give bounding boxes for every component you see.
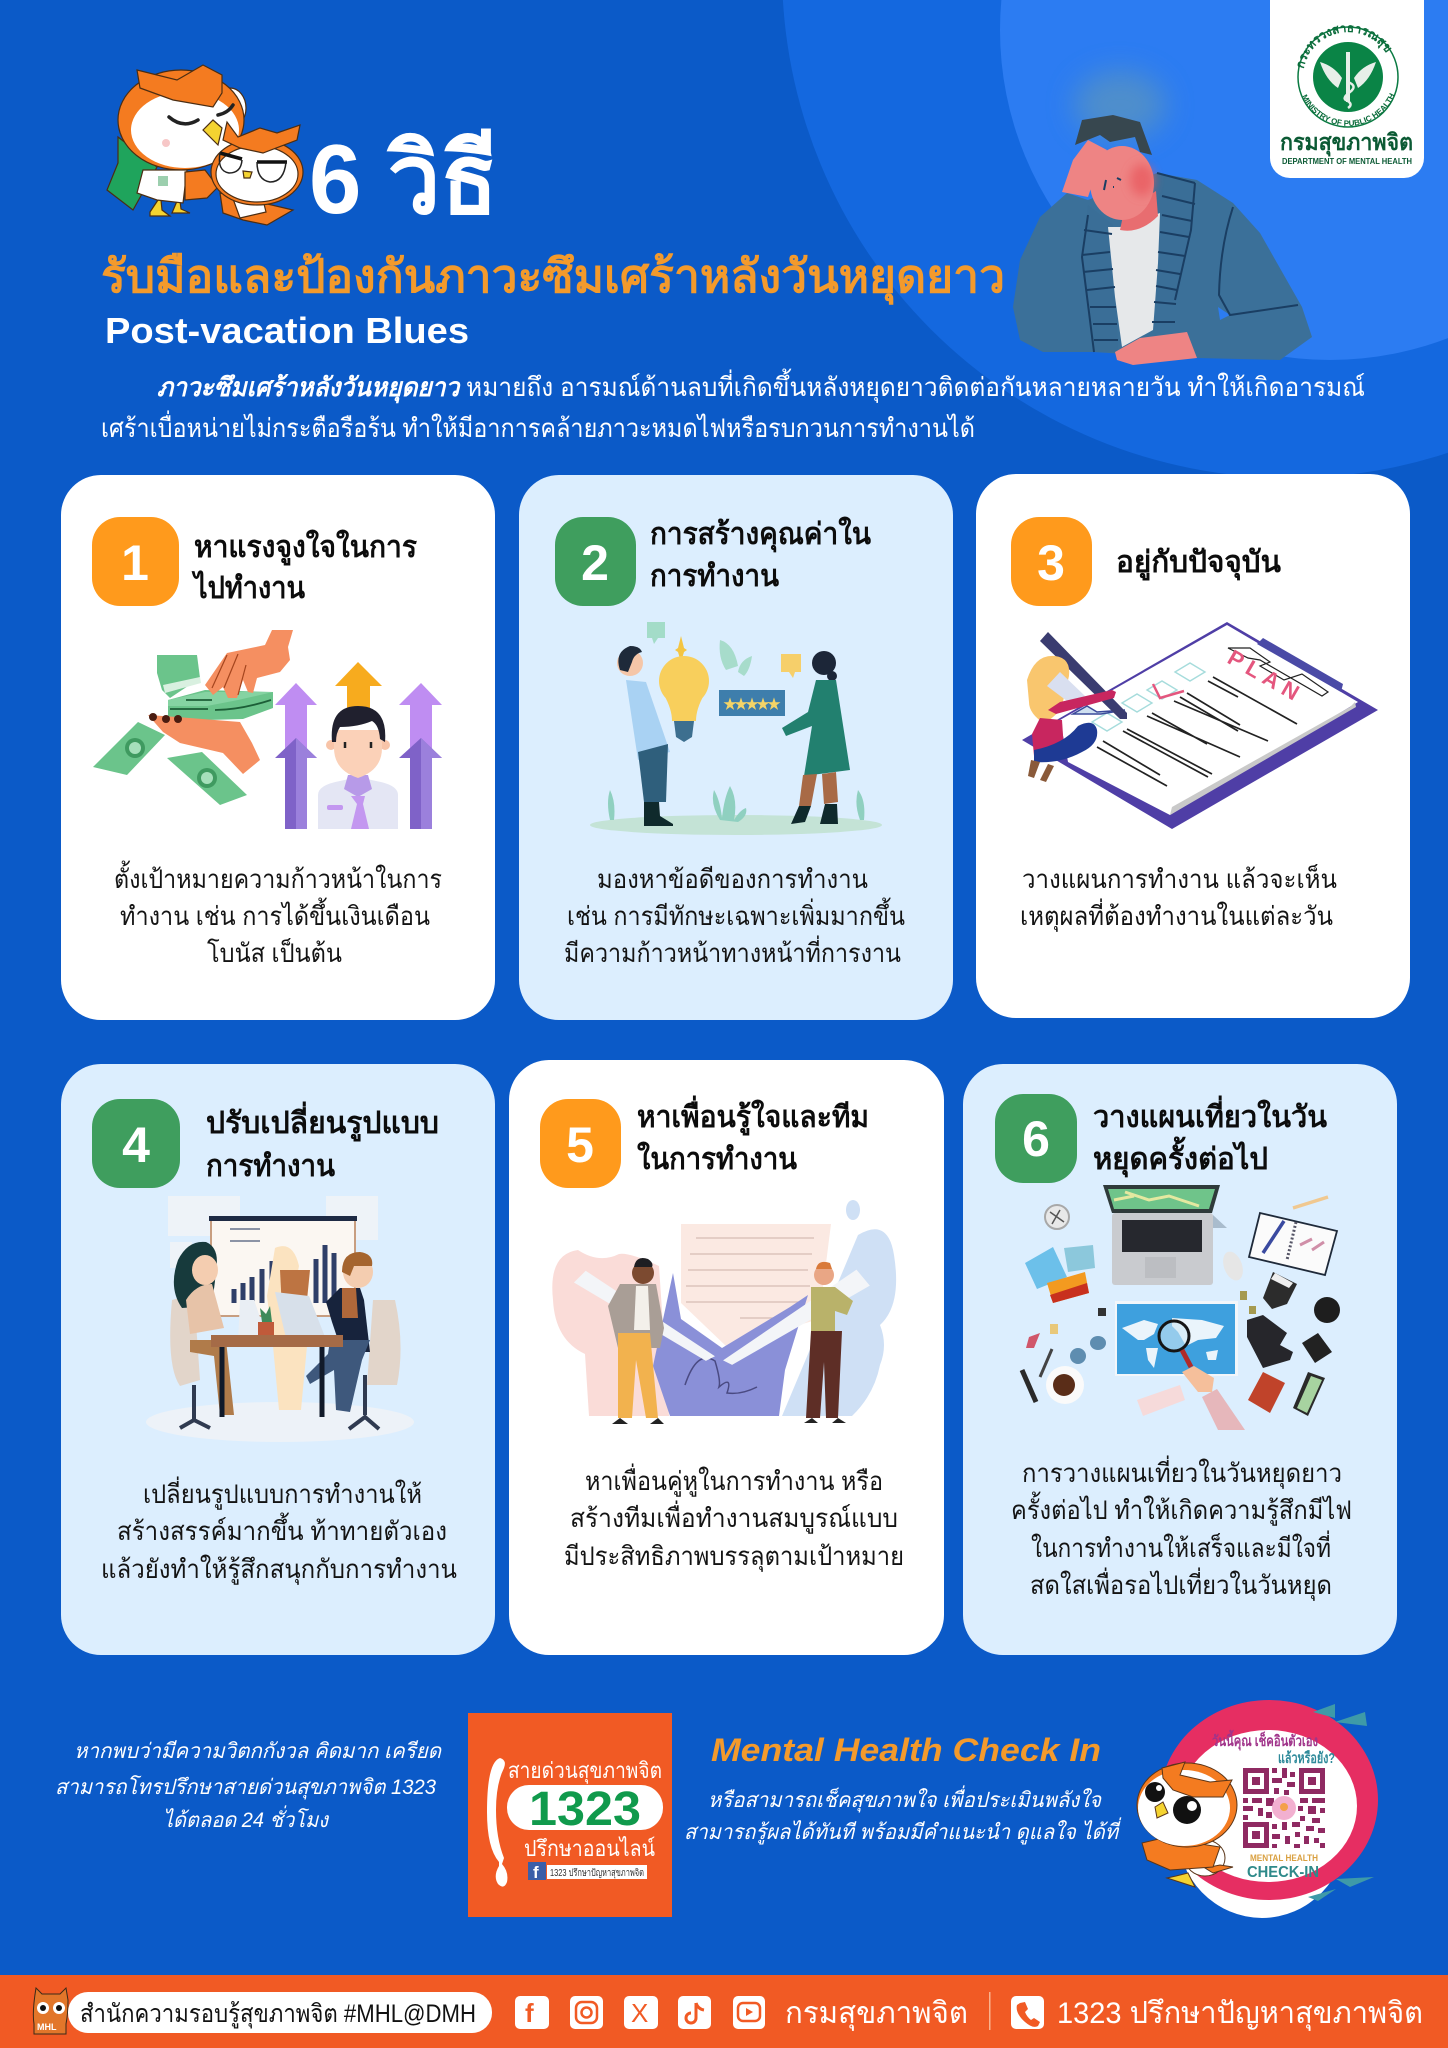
- card 2 description: [564, 864, 905, 968]
- illustration: two people signing with pens: [552, 1200, 896, 1424]
- panel: 1323 hotline card: [468, 1713, 672, 1917]
- number badge 4: [92, 1099, 180, 1188]
- social icon: facebook: [515, 1996, 549, 2029]
- text: hotline advice: [55, 1740, 442, 1832]
- card 6 description: ครั้งต่อไป ทำให้เกิดความรู้สึกมีไฟ: [1011, 1491, 1352, 1526]
- card 4 heading: [206, 1101, 439, 1183]
- illustration: two people with light bulb: [590, 622, 882, 835]
- number badge 1: [92, 517, 179, 606]
- check-in QR badge with owl: [1137, 1700, 1378, 1918]
- QR code: [1243, 1768, 1325, 1848]
- check-in QR badge with owl: แล้วหรือยัง?: [1278, 1750, 1335, 1767]
- card 2 description: เช่น การมีทักษะเฉพาะเพิ่มมากขึ้น: [567, 897, 905, 931]
- card 3 description: เหตุผลที่ต้องทำงานในแต่ละวัน: [1020, 898, 1333, 932]
- title: 6 วิธี: 6 วิธี: [309, 124, 498, 234]
- owl mascot: [1137, 1762, 1237, 1887]
- number badge 2: 2: [581, 535, 609, 591]
- illustration: stressed man: [1013, 71, 1312, 365]
- card 6 description: การวางแผนเที่ยวในวันหยุดยาว: [1022, 1455, 1342, 1489]
- icon: phone handset: [487, 1758, 507, 1887]
- footer bar: [0, 1975, 1448, 2048]
- card 1 heading: ไปทำงาน: [191, 570, 305, 605]
- check-in QR badge with owl: MENTAL HEALTH: [1250, 1853, 1318, 1863]
- card 4 description: สร้างสรรค์มากขึ้น ท้าทายตัวเอง: [117, 1512, 447, 1546]
- card 1 description: [114, 860, 442, 968]
- social icon: tiktok: [678, 1996, 711, 2029]
- card 6 description: สดใสเพื่อรอไปเที่ยวในวันหยุด: [1030, 1567, 1332, 1601]
- heading: mental health check in: Mental Health Check In: [711, 1732, 1101, 1768]
- text: check-in description: สามารถรู้ผลได้ทันที พร้อมมีคำแนะนำ ดูแลใจ ได้ที่: [684, 1817, 1122, 1845]
- card 4 description: [101, 1476, 457, 1585]
- facebook line: [528, 1862, 647, 1882]
- number badge 1: 1: [121, 535, 149, 591]
- card 1 heading: [191, 529, 417, 605]
- card 5 heading: ในการทำงาน: [637, 1141, 797, 1176]
- hotline number pill: [507, 1783, 663, 1836]
- card 5 description: สร้างทีมเพื่อทำงานสมบูรณ์แบบ: [570, 1500, 898, 1534]
- panel: card 3 present: [976, 474, 1410, 1018]
- number badge 2: [555, 517, 636, 606]
- panel: 1323 hotline card: ปรึกษาออนไลน์: [524, 1836, 655, 1861]
- check-in QR badge with owl: วันนี้คุณ เช็คอินตัวเอง: [1212, 1729, 1318, 1751]
- text: check-in description: [684, 1785, 1122, 1845]
- intro paragraph: เศร้าเบื่อหน่ายไม่กระตือรือร้น ทำให้มีอาการคล้ายภาวะหมดไฟหรือรบกวนการทำงานได้: [101, 410, 975, 443]
- panel: card 4 change work style: [61, 1064, 495, 1655]
- number badge 5: 5: [566, 1117, 594, 1173]
- panel: 1323 hotline card: สายด่วนสุขภาพจิต: [508, 1758, 662, 1784]
- icon: owl mascots: [107, 65, 303, 225]
- small owl: [211, 122, 303, 225]
- card 4 description: แล้วยังทำให้รู้สึกสนุกกับการทำงาน: [101, 1554, 457, 1585]
- big owl: [107, 65, 246, 216]
- card 5 heading: หาเพื่อนรู้ใจและทีม: [637, 1095, 869, 1136]
- heading: orange subtitle: รับมือและป้องกันภาวะซึมเศร้าหลังวันหยุดยาว: [101, 250, 1005, 305]
- card 6 heading: [1093, 1095, 1327, 1178]
- heading: english subtitle: Post-vacation Blues: [105, 310, 469, 351]
- social icon: x: [624, 1996, 658, 2029]
- logo: department of mental health: กระทรวงสาธารณสุข: [1298, 25, 1392, 68]
- card 1 description: ตั้งเป้าหมายความก้าวหน้าในการ: [114, 860, 442, 894]
- footer owl icon: MHL: [37, 2022, 57, 2032]
- social icon: youtube: [733, 1996, 765, 2029]
- illustration: two people with light bulb: ★★★★★: [723, 696, 781, 712]
- card 1 description: ทำงาน เช่น การได้ขึ้นเงินเดือน: [120, 897, 430, 931]
- number badge 4: 4: [122, 1117, 150, 1173]
- card 5 heading: [637, 1095, 869, 1176]
- logo: department of mental health: DEPARTMENT OF MENTAL HEALTH: [1282, 157, 1412, 166]
- footer hotline text: 1323 ปรึกษาปัญหาสุขภาพจิต: [1057, 1997, 1423, 2032]
- social icon: facebook: f: [525, 1998, 534, 2028]
- card 2 description: มองหาข้อดีของการทำงาน: [597, 864, 868, 894]
- card 5 description: [564, 1463, 904, 1572]
- panel: card 1 motivation: [61, 475, 495, 1020]
- card 1 description: โบนัส เป็นต้น: [207, 937, 342, 968]
- social icon: instagram: [570, 1996, 603, 2029]
- card 4 description: เปลี่ยนรูปแบบการทำงานให้: [143, 1476, 422, 1510]
- footer owl icon: [33, 1988, 68, 2034]
- illustration: team meeting: [146, 1196, 414, 1442]
- background circles: [782, 0, 1448, 478]
- illustration: plan clipboard: PLAN: [1224, 645, 1309, 708]
- text: hotline advice: สามารถโทรปรึกษาสายด่วนสุขภาพจิต 1323: [55, 1775, 436, 1800]
- footer pill: [68, 1992, 492, 2033]
- card 3 description: วางแผนการทำงาน แล้วจะเห็น: [1022, 863, 1337, 894]
- number badge 5: [540, 1099, 621, 1188]
- card 5 description: มีประสิทธิภาพบรรลุตามเป้าหมาย: [564, 1541, 904, 1572]
- card 2 heading: [650, 516, 871, 593]
- number badge 6: [995, 1094, 1077, 1183]
- illustration: plan clipboard: [1022, 622, 1378, 829]
- illustration: travel items flat lay: [1022, 1185, 1340, 1430]
- panel: card 5 teammates: [509, 1060, 944, 1655]
- text: check-in description: หรือสามารถเช็คสุขภาพใจ เพื่อประเมินพลังใจ: [708, 1785, 1103, 1813]
- card 6 heading: วางแผนเที่ยวในวัน: [1093, 1095, 1327, 1134]
- intro paragraph: [101, 368, 1365, 443]
- card 4 heading: การทำงาน: [206, 1150, 335, 1183]
- footer pill: สำนักความรอบรู้สุขภาพจิต #MHL@DMH: [80, 2000, 476, 2029]
- logo: department of mental health: [1270, 0, 1424, 178]
- facebook line: 1323 ปรึกษาปัญหาสุขภาพจิต: [550, 1867, 644, 1879]
- logo: department of mental health: กรมสุขภาพจิต: [1280, 129, 1413, 157]
- card 4 heading: ปรับเปลี่ยนรูปแบบ: [206, 1101, 439, 1142]
- hotline number pill: 1323: [529, 1783, 641, 1836]
- card 6 heading: หยุดครั้งต่อไป: [1093, 1136, 1268, 1178]
- card 3 description: [1020, 863, 1337, 932]
- social icon: x: X: [631, 1998, 648, 2028]
- card 5 description: หาเพื่อนคู่หูในการทำงาน หรือ: [585, 1463, 883, 1497]
- logo: department of mental health: MINISTRY OF PUBLIC HEALTH: [1302, 93, 1394, 126]
- card 2 description: มีความก้าวหน้าทางหน้าที่การงาน: [564, 935, 901, 968]
- card 6 description: [1011, 1455, 1352, 1601]
- card 3 heading: อยู่กับปัจจุบัน: [1116, 546, 1281, 581]
- panel: card 6 plan next trip: [963, 1064, 1397, 1655]
- text: hotline advice: ได้ตลอด 24 ชั่วโมง: [163, 1805, 330, 1832]
- illustration: money and career arrows: [93, 630, 442, 829]
- number badge 3: 3: [1037, 535, 1065, 591]
- icon: phone: [1011, 1996, 1044, 2029]
- intro paragraph: ภาวะซึมเศร้าหลังวันหยุดยาว หมายถึง อารมณ์ด้านลบที่เกิดขึ้นหลังหยุดยาวติดต่อกันหลายหลายวัน ทำให้เกิดอารมณ์: [157, 368, 1365, 404]
- number badge 6: 6: [1022, 1111, 1050, 1167]
- check-in QR badge with owl: CHECK-IN: [1247, 1864, 1319, 1881]
- number badge 3: [1011, 517, 1092, 606]
- card 2 heading: การทำงาน: [650, 560, 779, 593]
- card 2 heading: การสร้างคุณค่าใน: [650, 516, 871, 553]
- panel: card 2 value: [519, 475, 953, 1020]
- facebook line: f: [533, 1863, 539, 1882]
- card 1 heading: หาแรงจูงใจในการ: [194, 529, 417, 566]
- footer department name: กรมสุขภาพจิต: [785, 1997, 968, 2032]
- text: hotline advice: หากพบว่ามีความวิตกกังวล คิดมาก เครียด: [74, 1740, 442, 1763]
- card 6 description: ในการทำงานให้เสร็จและมีใจที่: [1031, 1530, 1331, 1563]
